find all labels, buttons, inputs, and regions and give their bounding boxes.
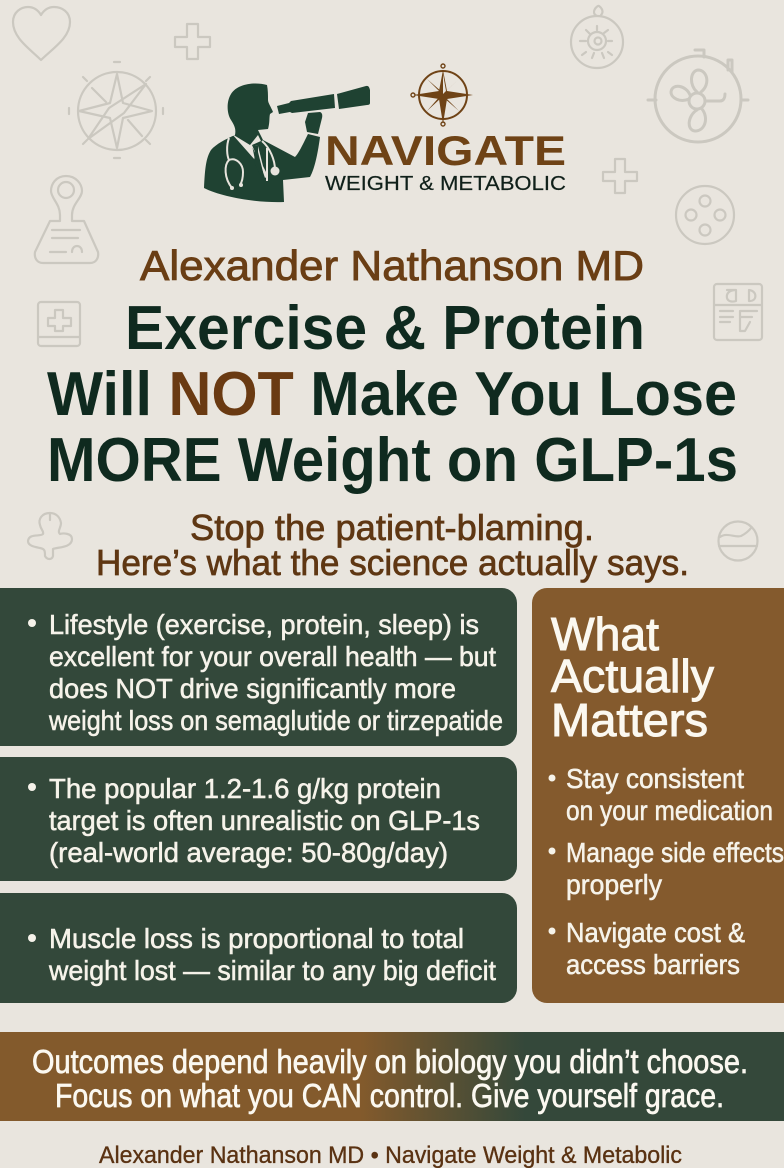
logo subtitle: WEIGHT & METABOLIC xyxy=(325,172,566,195)
list of what matters: Navigate cost & xyxy=(566,917,745,948)
logo xyxy=(204,64,566,202)
panel: lifestyle: Lifestyle (exercise, protein, sleep) is xyxy=(49,609,479,640)
icon: location pin with clipboard xyxy=(35,176,98,263)
icon: compass rose xyxy=(411,64,473,126)
list of what matters: properly xyxy=(566,869,662,900)
list of what matters: Stay consistent xyxy=(566,763,744,794)
icon: heart xyxy=(13,7,70,60)
panel heading xyxy=(551,608,714,746)
panel: lifestyle: does NOT drive significantly more xyxy=(49,673,456,704)
subtitle: Stop the patient-blaming. xyxy=(190,507,594,548)
icon: pill dish xyxy=(676,186,734,244)
panel: lifestyle xyxy=(0,588,517,746)
icon: faded compass xyxy=(69,62,163,158)
panel: muscle loss: Muscle loss is proportional to total xyxy=(49,923,464,954)
panel: lifestyle: weight loss on semaglutide or tirzepatide xyxy=(48,705,503,736)
panel: protein target: (real-world average: 50-80g/day) xyxy=(49,837,448,868)
panel: protein target: target is often unrealistic on GLP-1s xyxy=(49,805,480,836)
icon: medical cross right xyxy=(603,159,637,193)
panel: what actually matters xyxy=(532,588,784,1003)
panel: muscle loss xyxy=(0,893,517,1003)
logo wordmark: NAVIGATE xyxy=(325,127,566,174)
panel: muscle loss: weight lost — similar to any big deficit xyxy=(48,955,496,986)
banner xyxy=(0,1032,784,1121)
panel heading: What xyxy=(551,608,659,660)
icon: medical book xyxy=(38,302,80,346)
icon: chart document xyxy=(714,284,762,340)
subtitle xyxy=(96,507,689,583)
icon: molecule shape left xyxy=(28,513,72,559)
panel: protein target xyxy=(0,757,517,881)
title xyxy=(47,294,738,495)
icon: doctor with telescope silhouette xyxy=(204,84,370,202)
subtitle: Here’s what the science actually says. xyxy=(96,542,689,583)
icon: receptor in circle xyxy=(648,50,748,142)
list of what matters xyxy=(548,763,784,980)
icon: medical cross top left xyxy=(175,24,210,59)
panel: protein target: The popular 1.2-1.6 g/kg protein xyxy=(49,773,441,804)
author name: Alexander Nathanson MD xyxy=(140,242,644,289)
icon: cell in circle xyxy=(571,6,623,68)
panel heading: Actually xyxy=(551,650,714,702)
panel: lifestyle: excellent for your overall health — but xyxy=(49,641,496,672)
icon: landscape in circle xyxy=(718,522,758,560)
title: Will NOT Make You Lose xyxy=(47,360,737,429)
panel heading: Matters xyxy=(551,694,708,746)
title: MORE Weight on GLP-1s xyxy=(47,426,738,495)
title: Exercise & Protein xyxy=(125,294,645,363)
list of what matters: access barriers xyxy=(566,949,740,980)
